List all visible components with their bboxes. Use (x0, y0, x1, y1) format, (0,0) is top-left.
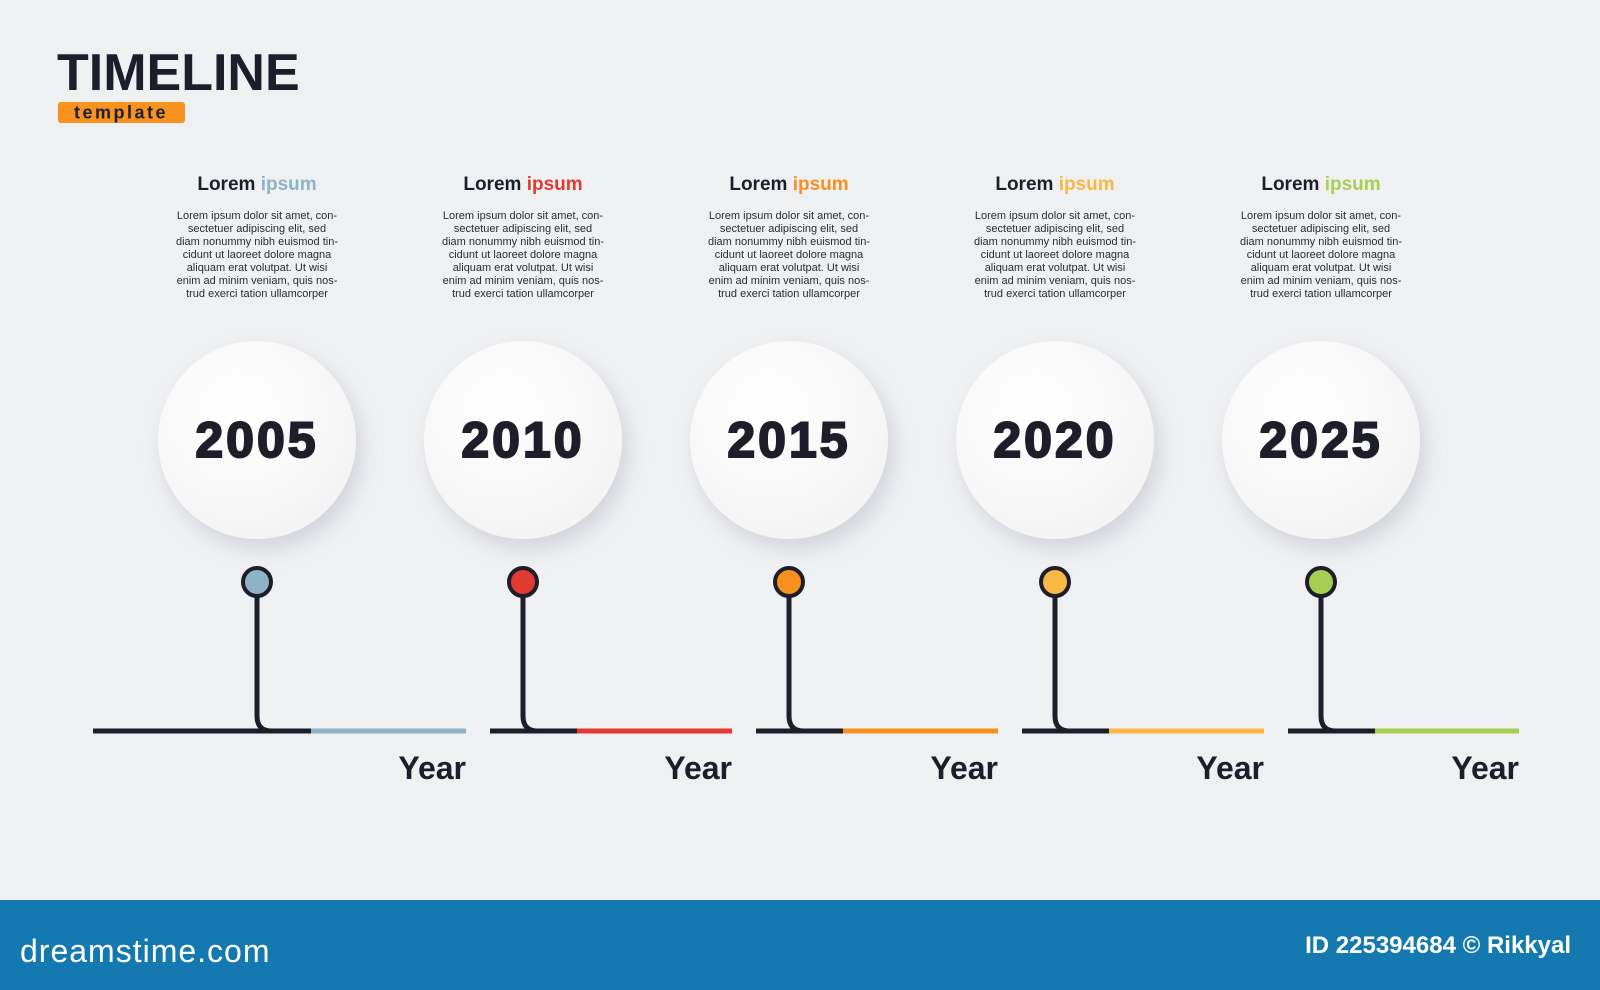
year circle (690, 341, 888, 539)
body text (708, 210, 870, 300)
body text: Lorem ipsum dolor sit amet, con- (443, 210, 603, 222)
body text: Lorem ipsum dolor sit amet, con- (709, 210, 869, 222)
body text: diam nonummy nibh euismod tin- (176, 236, 338, 248)
year circle (424, 341, 622, 539)
pin and line (1288, 568, 1519, 731)
footer credit: ID 225394684 © Rikkyal (1305, 932, 1571, 959)
year circle: 2015 (727, 412, 851, 468)
title: TIMELINE (57, 44, 300, 102)
milestone 2005 (93, 174, 466, 786)
body text: aliquam erat volutpat. Ut wisi (985, 262, 1125, 274)
pin and line (93, 568, 466, 731)
body text: cidunt ut laoreet dolore magna (1247, 249, 1396, 261)
body text: enim ad minim veniam, quis nos- (709, 275, 870, 287)
heading: Lorem ipsum (995, 174, 1115, 195)
body text: aliquam erat volutpat. Ut wisi (453, 262, 593, 274)
body text: aliquam erat volutpat. Ut wisi (1251, 262, 1391, 274)
body text: enim ad minim veniam, quis nos- (975, 275, 1136, 287)
body text (442, 210, 604, 300)
pin and line (756, 568, 998, 731)
body text: aliquam erat volutpat. Ut wisi (187, 262, 327, 274)
footer bar (0, 900, 1600, 990)
body text: trud exerci tation ullamcorper (452, 288, 594, 300)
body text: trud exerci tation ullamcorper (718, 288, 860, 300)
body text: diam nonummy nibh euismod tin- (974, 236, 1136, 248)
year circle: 2010 (461, 412, 585, 468)
body text: Lorem ipsum dolor sit amet, con- (975, 210, 1135, 222)
pin and line (1022, 568, 1264, 731)
body text: diam nonummy nibh euismod tin- (1240, 236, 1402, 248)
milestone 2020 (956, 174, 1264, 786)
heading: Lorem ipsum (463, 174, 583, 195)
body text: trud exerci tation ullamcorper (1250, 288, 1392, 300)
year circle: 2005 (195, 412, 319, 468)
body text: aliquam erat volutpat. Ut wisi (719, 262, 859, 274)
footer logo: dreamstime.com (20, 933, 270, 969)
year circle (158, 341, 356, 539)
body text: cidunt ut laoreet dolore magna (183, 249, 332, 261)
body text: sectetuer adipiscing elit, sed (720, 223, 858, 235)
pin and line (490, 568, 732, 731)
year circle: 2025 (1259, 412, 1383, 468)
milestone 2015 (690, 174, 998, 786)
body text: cidunt ut laoreet dolore magna (715, 249, 864, 261)
body text: enim ad minim veniam, quis nos- (1241, 275, 1402, 287)
body text: Lorem ipsum dolor sit amet, con- (177, 210, 337, 222)
body text: Lorem ipsum dolor sit amet, con- (1241, 210, 1401, 222)
body text (176, 210, 338, 300)
body text: sectetuer adipiscing elit, sed (1252, 223, 1390, 235)
year label: Year (930, 750, 998, 786)
year circle: 2020 (993, 412, 1117, 468)
body text: diam nonummy nibh euismod tin- (708, 236, 870, 248)
body text: trud exerci tation ullamcorper (186, 288, 328, 300)
body text: cidunt ut laoreet dolore magna (449, 249, 598, 261)
year label: Year (1451, 750, 1519, 786)
body text: sectetuer adipiscing elit, sed (986, 223, 1124, 235)
body text (974, 210, 1136, 300)
year label: Year (664, 750, 732, 786)
heading: Lorem ipsum (729, 174, 849, 195)
body text: enim ad minim veniam, quis nos- (177, 275, 338, 287)
body text: cidunt ut laoreet dolore magna (981, 249, 1130, 261)
body text: trud exerci tation ullamcorper (984, 288, 1126, 300)
heading: Lorem ipsum (1261, 174, 1381, 195)
body text: enim ad minim veniam, quis nos- (443, 275, 604, 287)
body text (1240, 210, 1402, 300)
year label: Year (398, 750, 466, 786)
year circle (1222, 341, 1420, 539)
subtitle badge: template (74, 102, 168, 122)
body text: sectetuer adipiscing elit, sed (454, 223, 592, 235)
milestone 2025 (1222, 174, 1519, 786)
heading: Lorem ipsum (197, 174, 317, 195)
body text: sectetuer adipiscing elit, sed (188, 223, 326, 235)
year label: Year (1196, 750, 1264, 786)
year circle (956, 341, 1154, 539)
body text: diam nonummy nibh euismod tin- (442, 236, 604, 248)
milestone 2010 (424, 174, 732, 786)
